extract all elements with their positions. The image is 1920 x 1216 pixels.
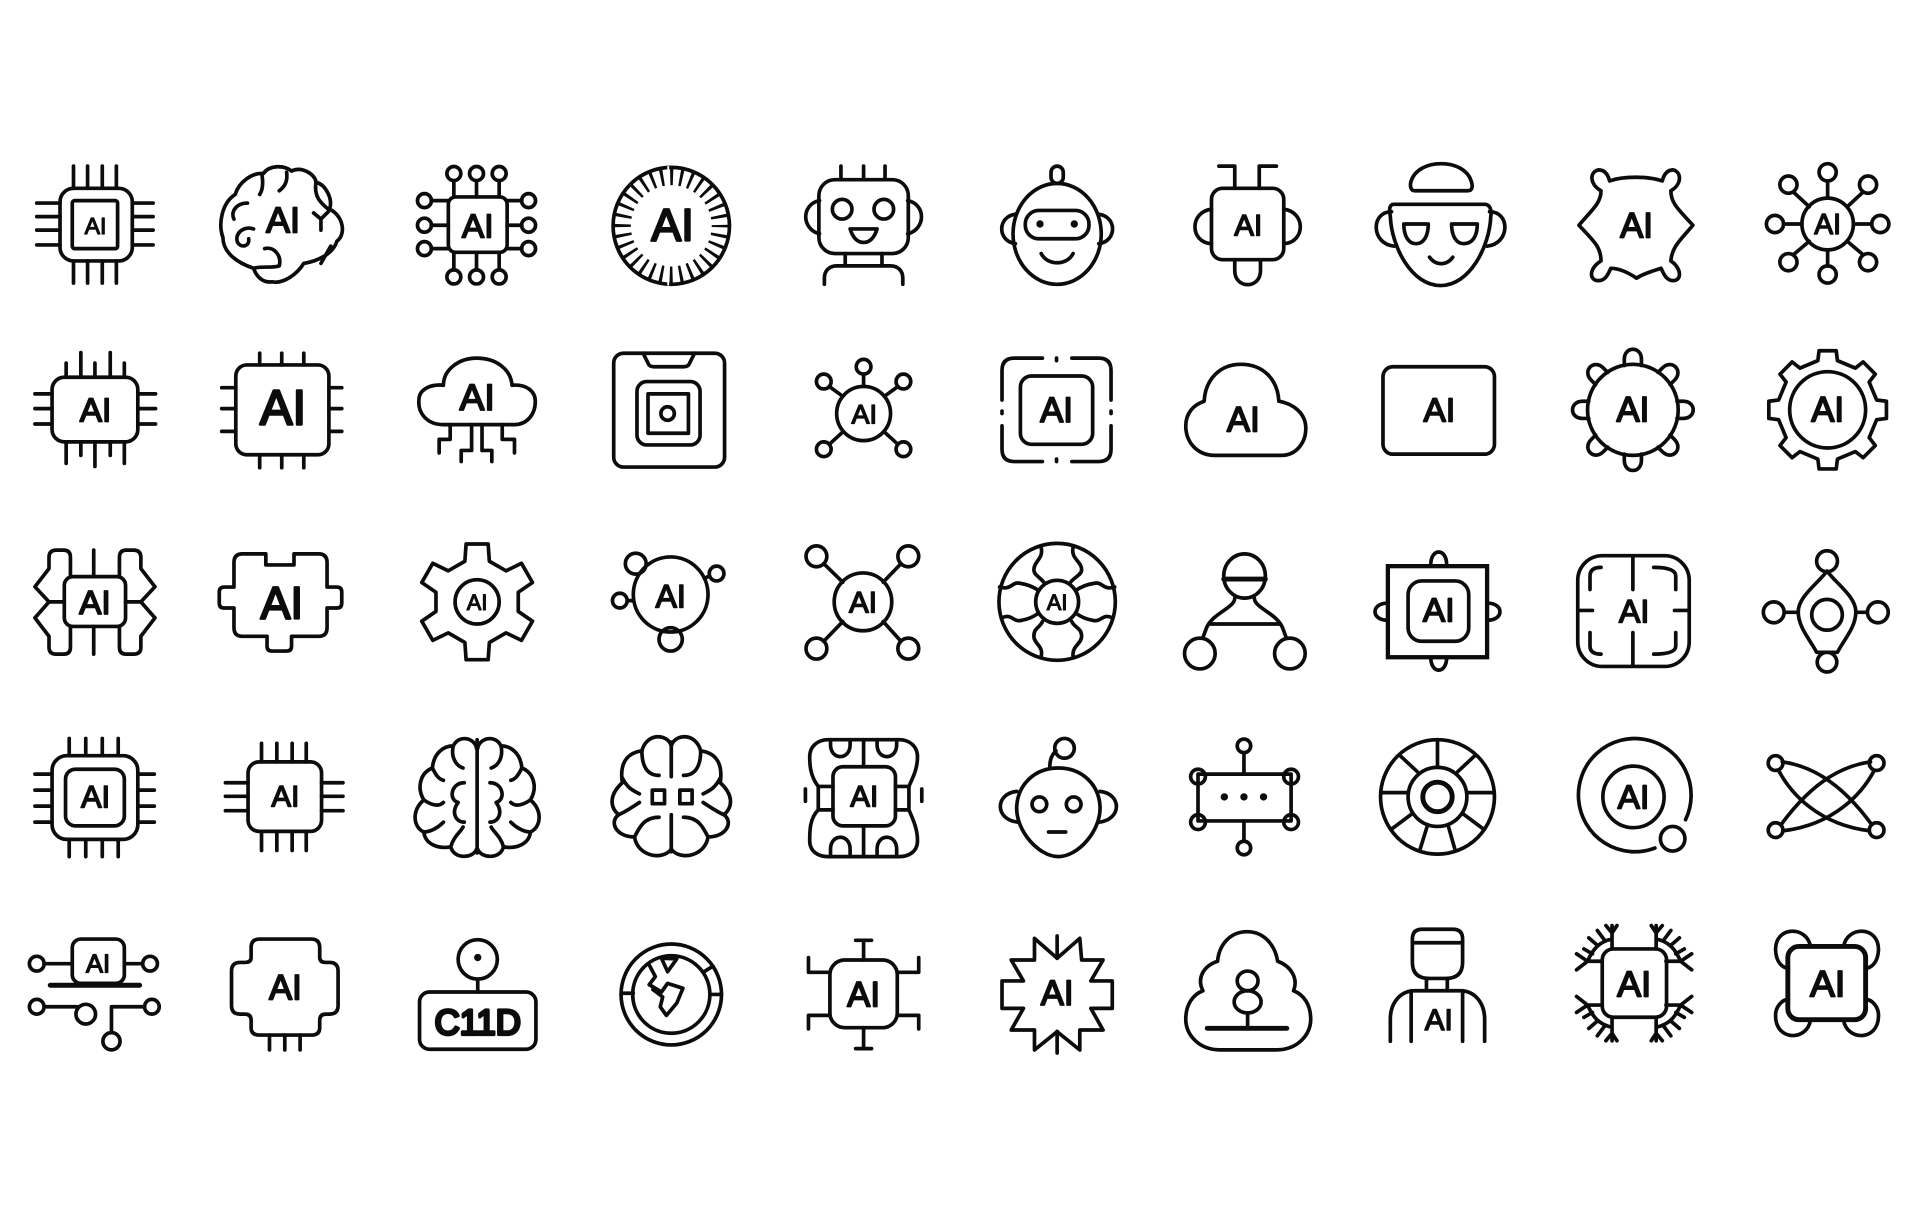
icon: AI orbit ring: [1578, 739, 1691, 852]
icon: brain with chip squares: [612, 737, 730, 856]
icon: AI globe segments: [999, 543, 1115, 660]
icon: AI puzzle piece: [219, 554, 342, 651]
icon: AI puzzle piece: AI: [260, 577, 303, 628]
icon: earth globe: [621, 944, 722, 1045]
icon: AI cloud: [1186, 364, 1306, 455]
icon: robot chip with antennas: [1195, 166, 1300, 285]
icon: branching node tree: [1185, 554, 1305, 669]
icon: AI rectangle: [1383, 367, 1494, 454]
icon: eye with four nodes: [1763, 551, 1888, 672]
icon: AI chip with hexagonal wings: AI: [79, 585, 111, 622]
icon: eight-node network: [1766, 164, 1889, 283]
icon: C11D sign: C11D: [435, 1003, 521, 1042]
icon: AI circuit traces: [29, 939, 159, 1050]
icon: AI brain: [221, 167, 342, 282]
icon: compact chip: [225, 743, 343, 850]
icon: AI chip with corner lobes: AI: [1810, 963, 1845, 1005]
icon: cloud tree: [1186, 932, 1311, 1050]
icon: AI cloud with circuit roots: [419, 358, 535, 462]
icon: AI chip with bottom pins: AI: [269, 968, 302, 1007]
icon: C11D sign: [420, 940, 536, 1049]
icon: AI chip on capsule board: AI: [850, 781, 878, 814]
icon: AI circle with tabs: AI: [1616, 391, 1649, 430]
icon: AI square with side tabs: [1375, 552, 1500, 670]
icon: AI circle with satellite nodes: AI: [655, 578, 686, 614]
icon: AI starburst: AI: [1041, 974, 1074, 1013]
icon: AI chip with branching roots: [1577, 926, 1692, 1041]
icon: AI six-tooth gear: AI: [467, 590, 487, 615]
icon: AI dial: [613, 166, 729, 286]
icon: AI focus frame: [1578, 556, 1689, 666]
icon: AI chip in dashed frame: [1002, 358, 1111, 462]
icon: chip with circuit nodes: [417, 167, 536, 284]
icon: AI focus frame: AI: [1619, 593, 1649, 629]
icon: tablet with processor: [614, 353, 725, 467]
icon: chip with inner square: [37, 166, 153, 283]
icon: smiling robot: [806, 166, 921, 284]
icon: eight-node network: AI: [1814, 209, 1841, 241]
icon: AI rectangle: AI: [1424, 393, 1455, 430]
icon: crossed network nodes: [1768, 756, 1884, 838]
icon: AI chip on capsule board: [805, 740, 922, 857]
icon: AI lobed blob: [1579, 170, 1693, 281]
icon: robot chip with antennas: AI: [1234, 210, 1262, 243]
icon: robot head with antenna: [1000, 738, 1116, 857]
icon: five-node network: [816, 359, 911, 457]
icon: robot face with visor: [1002, 166, 1113, 284]
icon: segmented wheel: [1381, 740, 1494, 854]
icon: brain with midline: [415, 739, 539, 856]
icon: AI gear with ring: [1769, 351, 1886, 469]
icon: AI chip with bottom pins: [232, 939, 338, 1050]
icon: AI circle with satellite nodes: [612, 553, 724, 651]
icon: five-node network: AI: [851, 398, 877, 429]
icon: AI six-tooth gear: [422, 544, 532, 660]
icon: chip with staggered pins: [35, 353, 156, 466]
icon: AI brain: AI: [266, 200, 300, 241]
icon: AI gear with ring: AI: [1811, 391, 1844, 430]
icon: AI engineer figure: AI: [1425, 1004, 1453, 1037]
icon: AI starburst: [1002, 936, 1112, 1053]
icon: large AI chip: [222, 353, 342, 468]
icon: AI square with side tabs: AI: [1423, 592, 1455, 630]
icon: robot mask with hat: [1376, 164, 1505, 286]
icon: chip with circuit nodes: AI: [462, 208, 494, 246]
icon: large AI chip: AI: [260, 381, 306, 435]
icon: AI globe segments: AI: [1047, 590, 1067, 615]
icon: AI circuit traces: AI: [86, 950, 110, 978]
icon: AI chip in dashed frame: AI: [1040, 391, 1073, 430]
icon: chip with inner square: AI: [85, 213, 106, 239]
icon: AI chip with corner lobes: [1776, 931, 1879, 1036]
icon: double-frame chip: [35, 738, 154, 857]
icon: AI chip with branching roots: AI: [1617, 964, 1651, 1005]
icon: AI dial: AI: [651, 200, 694, 251]
icon: AI circle with tabs: [1573, 349, 1693, 470]
icon: AI chip with corner brackets: AI: [847, 976, 880, 1015]
icon: AI cloud with circuit roots: AI: [459, 376, 495, 418]
icon: AI chip with corner brackets: [808, 940, 919, 1049]
icon: chip with staggered pins: AI: [80, 393, 111, 430]
icon: AI orbit ring: AI: [1618, 779, 1649, 816]
icon: AI engineer figure: [1390, 929, 1485, 1041]
icon: four-node network: [806, 546, 919, 659]
icon: node rectangle with dots: [1191, 739, 1298, 855]
icon: double-frame chip: AI: [81, 779, 110, 814]
icon: AI chip with hexagonal wings: [35, 550, 155, 654]
icon: AI lobed blob: AI: [1620, 206, 1653, 246]
icon: compact chip: AI: [271, 781, 299, 814]
icon: AI cloud: AI: [1227, 401, 1260, 440]
icon: four-node network: AI: [849, 586, 877, 619]
